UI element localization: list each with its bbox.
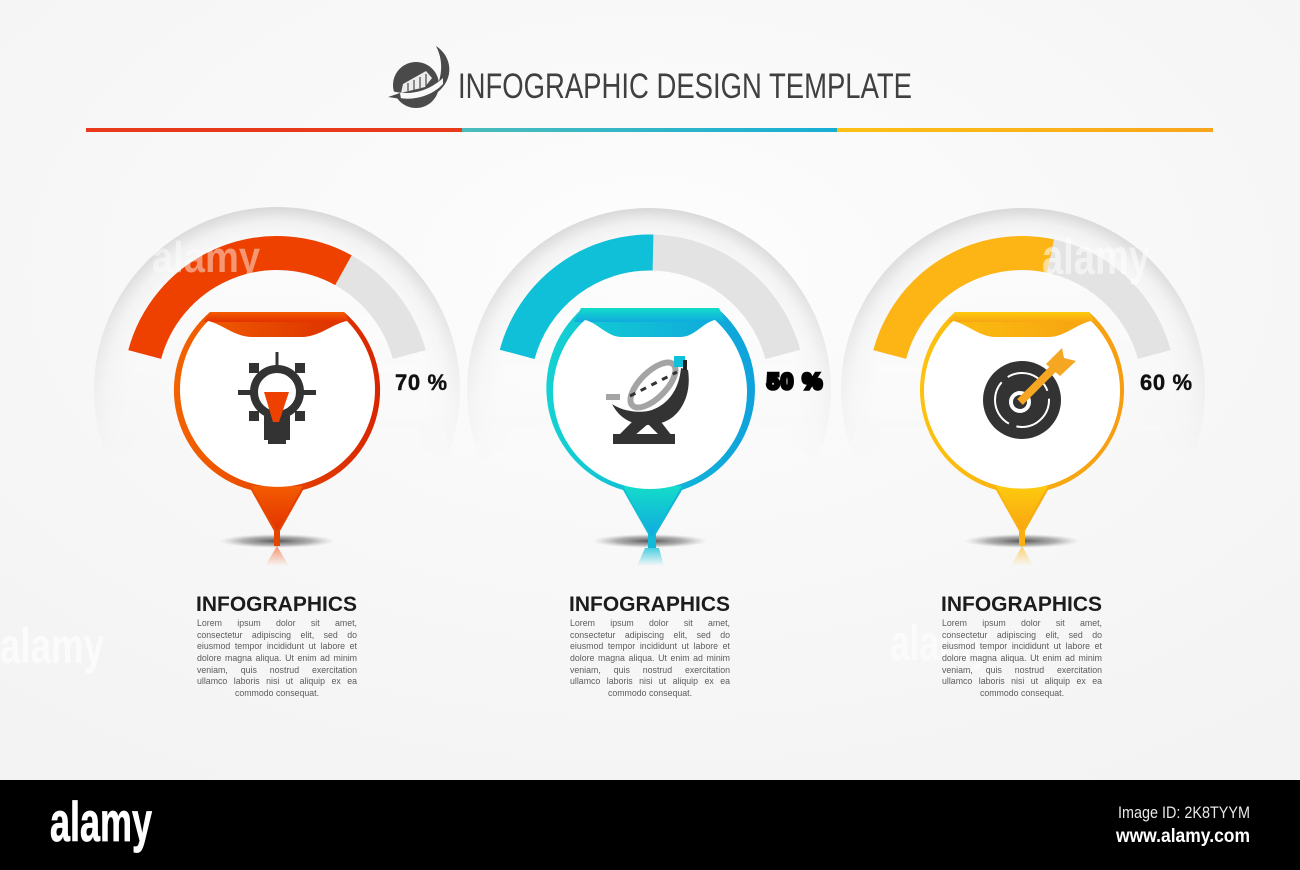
percent label: 60 %	[1140, 370, 1192, 395]
panel: gauge 2 cyan 50%	[467, 208, 831, 572]
text block 2: commodo consequat.	[608, 688, 692, 698]
text block 3: veniam, quis nostrud exercitation	[942, 665, 1102, 675]
watermark: alamy over gauge 3: alamy	[1042, 229, 1150, 285]
ground shadow	[592, 534, 708, 548]
header colour rule	[86, 128, 1213, 132]
gauge value	[517, 252, 653, 354]
pin white face	[553, 320, 747, 489]
text block 1: INFOGRAPHICS	[196, 593, 357, 616]
icon: satellite dish	[606, 355, 689, 444]
pin white face	[924, 321, 1120, 489]
percent label: 50 %	[767, 369, 822, 394]
logo icon	[388, 46, 449, 108]
watermark: alamy lower right: alamy	[890, 615, 990, 671]
footer logo: alamy	[50, 790, 152, 853]
text block 2: dolore magna aliqua. Ut enim ad minim	[570, 653, 730, 663]
ground shadow	[219, 534, 335, 548]
halo circle	[841, 208, 1204, 390]
halo circle	[467, 208, 831, 390]
text block 1: ullamco laboris nisi ut aliquip ex ea	[197, 676, 357, 686]
text block 2	[569, 593, 730, 698]
text block 1	[196, 593, 357, 698]
text block 3: consectetur adipiscing elit, sed do	[942, 630, 1102, 640]
panel: gauge 1 red 70%	[94, 207, 460, 573]
ground shadow	[964, 534, 1080, 548]
text block 2: Lorem ipsum dolor sit amet,	[570, 618, 730, 628]
text block 2: veniam, quis nostrud exercitation	[570, 665, 730, 675]
text block 3: dolore magna aliqua. Ut enim ad minim	[942, 653, 1102, 663]
text block 1: commodo consequat.	[235, 688, 319, 698]
pin	[546, 308, 755, 548]
text block 3: INFOGRAPHICS	[941, 593, 1102, 616]
watermark: alamy over gauge 1: alamy	[152, 233, 260, 282]
pin white face	[180, 321, 375, 487]
gauge track	[145, 253, 409, 354]
percent label: 70 %	[395, 370, 447, 395]
icon: light bulb with gear	[238, 352, 316, 444]
text block 1: Lorem ipsum dolor sit amet,	[197, 618, 357, 628]
text block 3	[941, 593, 1102, 698]
gauge value	[145, 253, 343, 354]
title: INFOGRAPHIC DESIGN TEMPLATE	[458, 67, 912, 106]
text block 3: ullamco laboris nisi ut aliquip ex ea	[942, 676, 1102, 686]
footer url: www.alamy.com	[1115, 826, 1250, 847]
pin	[174, 312, 380, 546]
gauge track	[517, 253, 783, 354]
text block 1: consectetur adipiscing elit, sed do	[197, 630, 357, 640]
watermark: alamy lower left: alamy	[0, 618, 104, 674]
gauge value	[890, 253, 1050, 354]
gauge track	[890, 253, 1154, 354]
text block 1: veniam, quis nostrud exercitation	[197, 665, 357, 675]
pin reflection	[637, 548, 664, 566]
text block 3: eiusmod tempor incididunt ut labore et	[942, 641, 1102, 651]
text block 2: INFOGRAPHICS	[569, 593, 730, 616]
footer bar	[0, 780, 1300, 870]
footer image id: Image ID: 2K8TYYM	[1118, 803, 1250, 822]
text block 2: eiusmod tempor incididunt ut labore et	[570, 641, 730, 651]
icon: target with arrow	[983, 348, 1076, 439]
text block 2: ullamco laboris nisi ut aliquip ex ea	[570, 676, 730, 686]
text block 3: commodo consequat.	[980, 688, 1064, 698]
halo circle	[94, 207, 460, 390]
text block 3: Lorem ipsum dolor sit amet,	[942, 618, 1102, 628]
text block 1: dolore magna aliqua. Ut enim ad minim	[197, 653, 357, 663]
panel: gauge 3 yellow 60%	[841, 208, 1205, 572]
text block 2: consectetur adipiscing elit, sed do	[570, 630, 730, 640]
pin reflection	[265, 546, 289, 566]
pin reflection	[1011, 546, 1033, 566]
pin	[920, 312, 1124, 546]
text block 1: eiusmod tempor incididunt ut labore et	[197, 641, 357, 651]
